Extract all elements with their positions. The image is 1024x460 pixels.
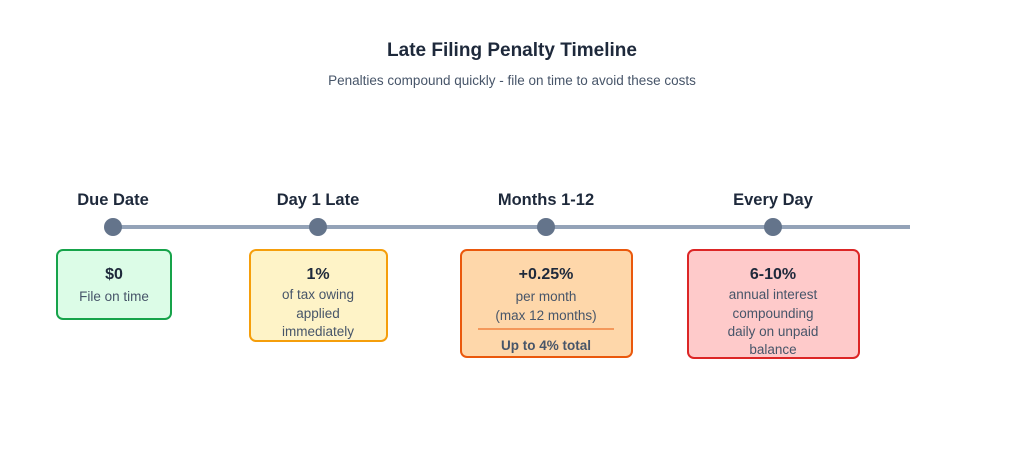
milestone: Day 1 Late: immediately xyxy=(282,324,354,339)
milestone: Due Date: $0 xyxy=(105,266,123,283)
milestone: Due Date: File on time xyxy=(79,289,149,304)
milestone: Every Day: daily on unpaid xyxy=(728,324,818,339)
milestone: Day 1 Late: of tax owing xyxy=(282,287,354,302)
milestone: Months 1-12: +0.25% xyxy=(519,266,573,283)
milestone: Day 1 Late: Day 1 Late xyxy=(277,191,359,209)
milestone: Day 1 Late: 1% xyxy=(306,266,330,283)
milestone: Every Day xyxy=(688,191,859,358)
milestone: Every Day: 6-10% xyxy=(750,266,796,283)
milestone: Due Date xyxy=(57,191,171,319)
milestone: Months 1-12: (max 12 months) xyxy=(495,308,597,323)
milestone: Every Day: balance xyxy=(749,342,797,357)
milestone: Months 1-12: per month xyxy=(516,289,576,304)
milestone: Every Day: annual interest xyxy=(729,287,818,302)
milestone: Day 1 Late xyxy=(250,191,387,341)
milestone: Months 1-12 xyxy=(461,191,632,357)
milestone: Months 1-12: Months 1-12 xyxy=(498,191,594,209)
milestone: Months 1-12: Up to 4% total xyxy=(501,338,591,353)
milestone: Due Date: Due Date xyxy=(77,191,149,209)
milestone: Every Day: Every Day xyxy=(733,191,814,209)
milestone: Every Day: compounding xyxy=(732,306,814,321)
title: Late Filing Penalty Timeline xyxy=(387,40,637,61)
subtitle: Penalties compound quickly - file on time to avoid these costs xyxy=(328,73,696,88)
milestone: Day 1 Late: applied xyxy=(296,306,340,321)
